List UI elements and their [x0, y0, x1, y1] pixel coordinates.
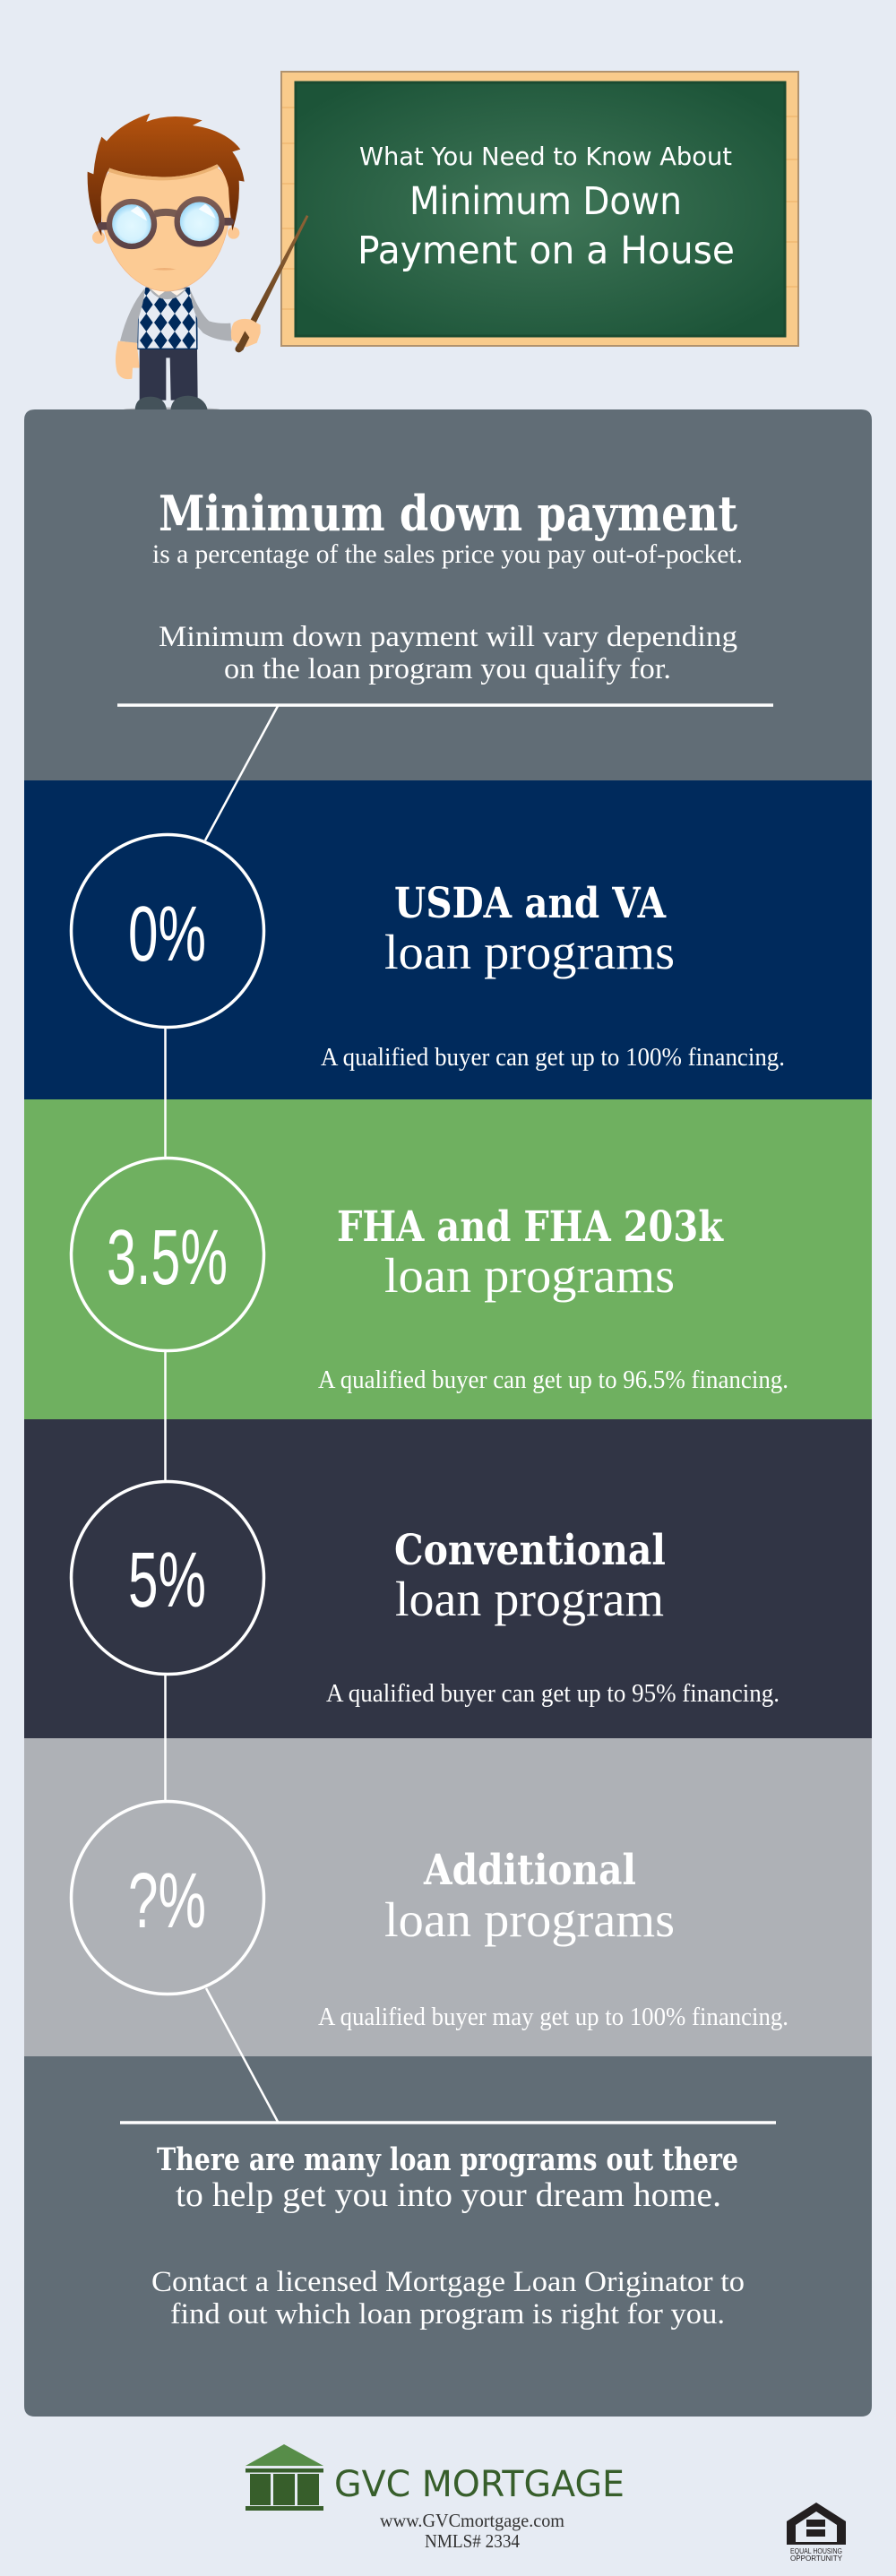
text: USDA and VA [321, 879, 785, 1072]
text: FHA and FHA 203k: loan programs [384, 1248, 675, 1303]
mouth [152, 268, 177, 271]
hair [88, 114, 245, 236]
website and NMLS [380, 2510, 564, 2552]
intro heading: Minimum down payment [159, 485, 737, 542]
circle: 3.5%: 3.5% [107, 1214, 228, 1301]
section: Conventional [24, 1419, 872, 1738]
chalkboard title: Minimum Down [409, 179, 682, 224]
text: Conventional: loan program [395, 1572, 664, 1626]
intro text: Minimum down payment will vary depending [159, 621, 737, 653]
section: FHA [24, 1099, 872, 1419]
circle: 0%: 0% [128, 891, 206, 978]
shoes [135, 396, 208, 409]
intro text [159, 621, 737, 685]
wood frame [281, 72, 798, 346]
connector lines [117, 705, 776, 2123]
fringe shadow [108, 164, 219, 180]
contact text: Contact a licensed Mortgage Loan Originator to [151, 2266, 745, 2298]
face [100, 159, 230, 291]
text: USDA and VA: A qualified buyer can get up to 100% financing. [321, 1044, 785, 1072]
icon: bank building [246, 2444, 323, 2511]
icon: equal housing opportunity [787, 2503, 846, 2563]
contact text: find out which loan program is right for you. [170, 2298, 725, 2330]
left arm [120, 289, 145, 343]
intro section [24, 409, 872, 780]
collar [149, 289, 186, 299]
chalkboard [281, 72, 798, 346]
text: Additional: A qualified buyer may get up to 100% financing. [318, 2003, 788, 2031]
floor shadow [124, 408, 220, 412]
text: USDA and VA: loan programs [384, 925, 675, 979]
right hand [231, 319, 261, 347]
closing statement: to help get you into your dream home. [176, 2176, 721, 2214]
intro text: on the loan program you qualify for. [224, 653, 671, 685]
circle: ?%: ?% [128, 1857, 206, 1944]
text: Conventional [326, 1526, 780, 1708]
logo: GVC Mortgage [246, 2444, 625, 2511]
right arm [190, 289, 232, 341]
text: Conventional: A qualified buyer can get up to 95% financing. [326, 1680, 780, 1708]
text: Conventional: Conventional [394, 1526, 666, 1575]
circle: 3.5% [72, 1158, 263, 1351]
contact text [151, 2266, 745, 2330]
chalkboard title [358, 142, 735, 273]
intro heading [152, 485, 743, 569]
section: USDA and VA [24, 780, 872, 1099]
ears [92, 231, 105, 244]
text: FHA and FHA 203k [318, 1202, 788, 1394]
pointer stick [235, 215, 308, 352]
text: FHA and FHA 203k: FHA and FHA 203k [337, 1202, 724, 1252]
argyle vest [137, 287, 198, 349]
circle: 0% [72, 835, 263, 1027]
circle: ?% [72, 1801, 263, 1994]
circle: 5% [72, 1482, 263, 1674]
icon: equal housing opportunity: OPPORTUNITY [790, 2554, 843, 2563]
text: Additional: Additional [423, 1846, 636, 1895]
text: Additional [318, 1846, 788, 2031]
text: USDA and VA: USDA and VA [394, 879, 666, 928]
teacher character [88, 114, 308, 412]
closing statement [157, 2141, 738, 2214]
main panel [24, 409, 872, 2417]
website and NMLS: NMLS# 2334 [425, 2530, 520, 2552]
circle: 5%: 5% [128, 1537, 206, 1624]
text: Additional: loan programs [384, 1892, 675, 1947]
section: Additional [24, 1738, 872, 2056]
closing section [24, 2056, 872, 2417]
icon: equal housing opportunity: EQUAL HOUSING [790, 2547, 842, 2555]
chalkboard title: What You Need to Know About [359, 142, 732, 171]
trousers [140, 348, 198, 401]
intro heading: is a percentage of the sales price you pay out-of-pocket. [152, 539, 743, 569]
text: FHA and FHA 203k: A qualified buyer can get up to 96.5% financing. [318, 1366, 788, 1394]
logo: GVC Mortgage: GVC MORTGAGE [334, 2464, 625, 2505]
website and NMLS: www.GVCmortgage.com [380, 2510, 564, 2531]
left hand [116, 341, 140, 379]
chalkboard title: Payment on a House [358, 228, 735, 273]
glasses [101, 199, 230, 246]
closing statement: There are many loan programs out there [157, 2141, 738, 2178]
